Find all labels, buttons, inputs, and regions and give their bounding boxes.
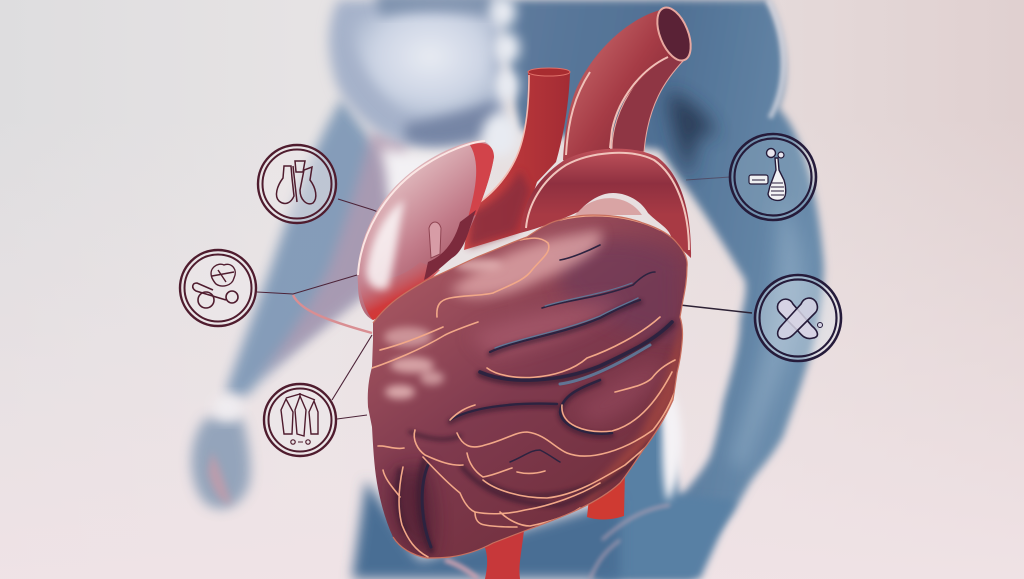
hand pink shade — [208, 452, 232, 503]
atrium rim edge — [358, 141, 485, 275]
salmon fold lines — [372, 216, 676, 557]
blue fold sheen — [495, 283, 650, 384]
tube highlights — [566, 57, 668, 155]
wrist highlight — [213, 395, 243, 421]
atrium white gloss — [366, 200, 404, 289]
atrium glossy lobe — [358, 141, 494, 320]
front arch — [520, 149, 691, 258]
right arm highlight — [730, 200, 804, 470]
pale gap below chest — [382, 148, 470, 200]
under-arch pale area — [575, 198, 642, 215]
lower oval highlight — [582, 368, 656, 422]
icon: left top, flasks — [258, 145, 336, 223]
left chest — [352, 11, 494, 119]
atrium finger — [429, 222, 441, 258]
second tube behind — [612, 55, 684, 152]
heart base — [360, 205, 695, 565]
dark navy folds — [422, 245, 672, 547]
top blue band — [375, 0, 495, 16]
big lobe highlight — [470, 300, 620, 355]
tube opening — [651, 3, 697, 65]
abdomen highlight — [662, 390, 682, 502]
right shoulder dark hollow — [668, 90, 718, 180]
left upper body — [329, 0, 505, 148]
vessel highlight — [476, 75, 529, 205]
heart — [358, 3, 697, 579]
icon: left middle, organ cluster — [180, 250, 256, 326]
right torso and arm — [498, 0, 824, 579]
abdomen right — [590, 400, 735, 579]
left lump highlights — [384, 259, 502, 399]
bottom pink stroke — [445, 560, 478, 579]
heart outline — [373, 215, 687, 558]
right shoulder rim — [768, 0, 783, 118]
pelvis and hip — [352, 480, 620, 579]
sternum beads — [482, 0, 520, 157]
icon: right top, bottle — [730, 134, 816, 220]
descending vessel stub — [587, 470, 625, 520]
icon: left bottom, bottles — [264, 384, 336, 456]
inferior vena cava — [484, 530, 524, 579]
blurred fold shadows — [398, 302, 672, 550]
right hand vein — [590, 505, 670, 579]
left arm inner shade — [258, 130, 410, 378]
right edge warm tint — [583, 322, 682, 505]
atrium red right rim — [468, 143, 494, 218]
human torso silhouette — [191, 0, 824, 579]
left arm — [226, 98, 392, 397]
upper right purple shading — [560, 240, 680, 340]
left chest lower shadow — [405, 100, 498, 145]
connector lines — [257, 177, 752, 419]
arch highlight — [526, 153, 689, 250]
left hand — [191, 418, 250, 509]
small rising vessel — [464, 72, 570, 250]
vessel rim — [528, 68, 570, 76]
icon: right bottom, crossed vessels — [755, 275, 841, 361]
atrium red band — [358, 262, 440, 320]
upper lump highlight — [450, 230, 602, 297]
vessel lower shade — [468, 170, 530, 248]
main ascending tube — [563, 10, 685, 170]
atrium inner pocket — [424, 210, 476, 280]
main heart body — [360, 205, 695, 565]
lower left shadow — [390, 465, 435, 558]
